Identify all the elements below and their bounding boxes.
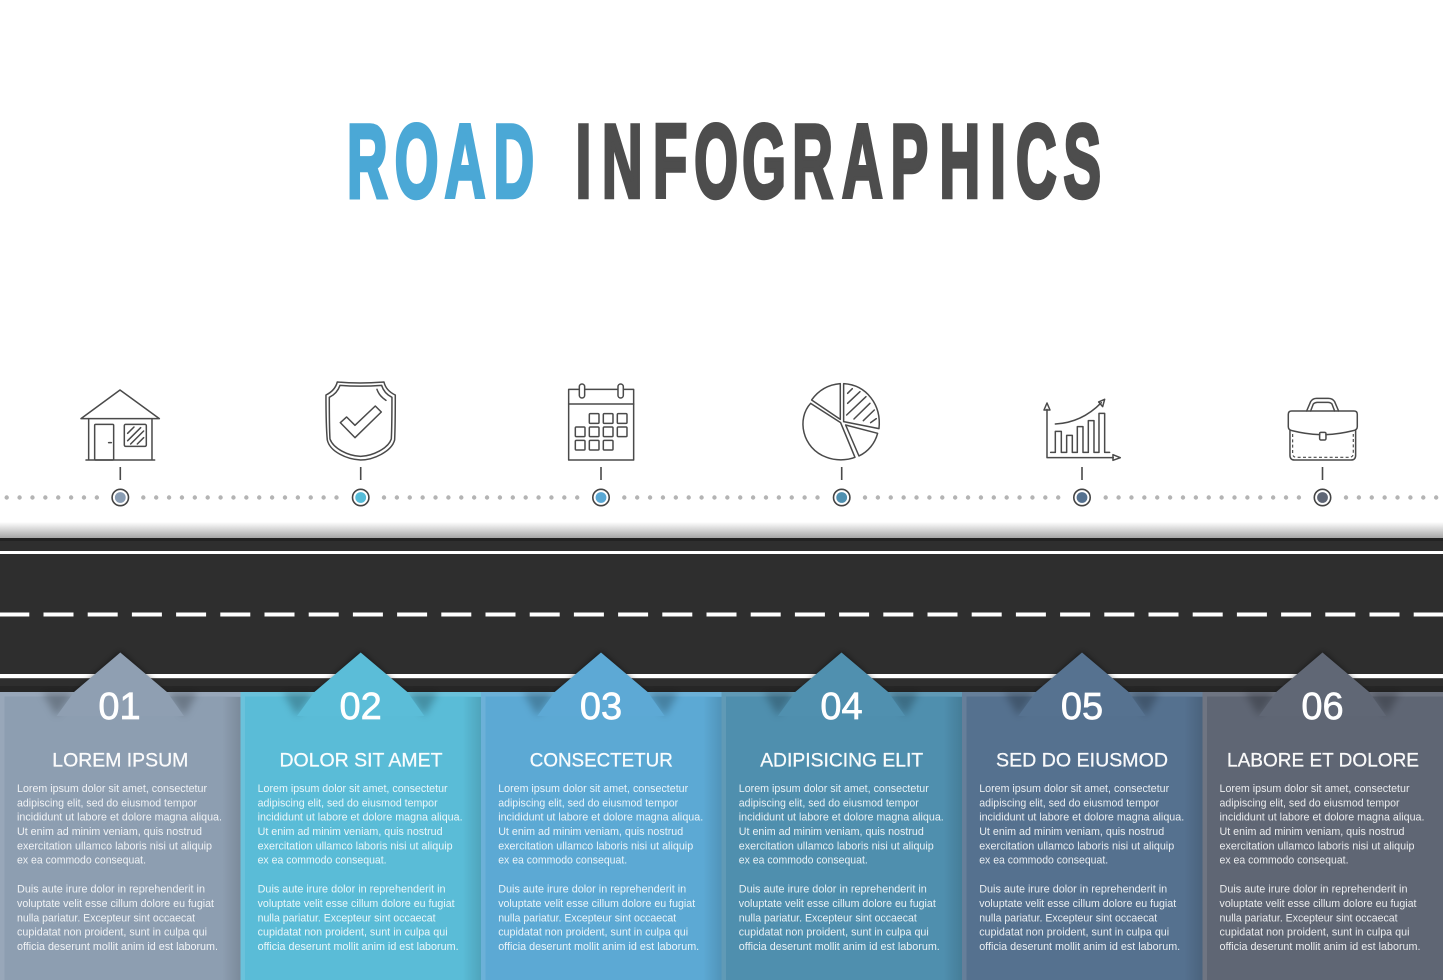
marker 4 — [834, 467, 850, 506]
panel 1 — [0, 652, 241, 980]
arrow 3 — [537, 652, 665, 716]
body text 1: Duis aute irure dolor in reprehenderit in — [17, 884, 205, 896]
icon: calendar — [569, 384, 634, 460]
arrow 4 — [778, 652, 905, 716]
panel 6 — [1202, 652, 1443, 980]
body text 1 — [17, 783, 222, 953]
marker 5 — [1074, 467, 1090, 506]
title word: INFOGRAPHICS: INFOGRAPHICS — [576, 102, 1101, 219]
body text 3: nulla pariatur. Excepteur sint occaecat — [498, 912, 676, 924]
body text 4: nulla pariatur. Excepteur sint occaecat — [739, 912, 917, 924]
number 06: 06 — [1301, 686, 1344, 728]
body text 5: officia deserunt mollit anim id est laborum. — [979, 941, 1180, 953]
body text 2 — [258, 783, 463, 953]
body text 2: incididunt ut labore et dolore magna aliqua. — [258, 812, 463, 824]
heading 4: ADIPISICING ELIT — [760, 750, 923, 772]
body text 3: Duis aute irure dolor in reprehenderit in — [498, 884, 686, 896]
body text 3: Lorem ipsum dolor sit amet, consectetur — [498, 783, 689, 795]
marker 2 — [352, 467, 369, 506]
icon: house — [81, 390, 159, 460]
number 02: 02 — [340, 686, 382, 728]
marker 1 — [112, 467, 128, 506]
heading 6: LABORE ET DOLORE — [1227, 750, 1419, 772]
heading 3: CONSECTETUR — [530, 750, 673, 772]
body text 6: voluptate velit esse cillum dolore eu fugiat — [1220, 898, 1416, 910]
body text 6: ex ea commodo consequat. — [1220, 855, 1348, 867]
arrow 2 — [297, 652, 424, 716]
panel 4 — [722, 652, 962, 980]
body text 5: exercitation ullamco laboris nisi ut aliquip — [979, 840, 1174, 852]
body text 4: Lorem ipsum dolor sit amet, consectetur — [739, 783, 929, 795]
body text 1: cupidatat non proident, sunt in culpa qui — [17, 927, 207, 939]
icon: briefcase — [1288, 398, 1357, 460]
body text 6: Ut enim ad minim veniam, quis nostrud — [1220, 826, 1404, 838]
icon: growth chart — [1044, 399, 1120, 460]
heading 5: SED DO EIUSMOD — [996, 750, 1168, 772]
body text 3 — [498, 783, 703, 953]
number 05: 05 — [1061, 686, 1103, 728]
body text 1: incididunt ut labore et dolore magna aliqua. — [17, 812, 222, 824]
panel 5 — [962, 652, 1203, 980]
body text 1: Ut enim ad minim veniam, quis nostrud — [17, 826, 202, 838]
body text 2: officia deserunt mollit anim id est laborum. — [258, 941, 459, 953]
body text 2: Duis aute irure dolor in reprehenderit in — [258, 884, 446, 896]
body text 2: adipiscing elit, sed do eiusmod tempor — [258, 797, 438, 809]
body text 3: voluptate velit esse cillum dolore eu fugiat — [498, 898, 695, 910]
body text 2: exercitation ullamco laboris nisi ut aliquip — [258, 840, 453, 852]
body text 6 — [1220, 783, 1424, 953]
body text 5: cupidatat non proident, sunt in culpa qui — [979, 927, 1169, 939]
arrow 6 — [1259, 652, 1386, 716]
body text 1: adipiscing elit, sed do eiusmod tempor — [17, 797, 197, 809]
body text 2: Ut enim ad minim veniam, quis nostrud — [258, 826, 443, 838]
body text 5: ex ea commodo consequat. — [979, 855, 1108, 867]
dotted timeline — [7, 495, 1440, 500]
body text 4: voluptate velit esse cillum dolore eu fugiat — [739, 898, 936, 910]
body text 3: incididunt ut labore et dolore magna aliqua. — [498, 812, 703, 824]
body text 6: adipiscing elit, sed do eiusmod tempor — [1220, 797, 1400, 809]
body text 1: officia deserunt mollit anim id est laborum. — [17, 941, 218, 953]
arrow 1 — [57, 652, 184, 716]
body text 4: incididunt ut labore et dolore magna aliqua. — [739, 812, 944, 824]
panel 2 — [240, 652, 482, 980]
marker 6 — [1314, 467, 1331, 506]
body text 3: Ut enim ad minim veniam, quis nostrud — [498, 826, 683, 838]
body text 4: cupidatat non proident, sunt in culpa qui — [739, 927, 929, 939]
body text 3: exercitation ullamco laboris nisi ut aliquip — [498, 840, 693, 852]
body text 6: incididunt ut labore et dolore magna aliqua. — [1220, 812, 1424, 824]
body text 4: adipiscing elit, sed do eiusmod tempor — [739, 797, 919, 809]
body text 5: voluptate velit esse cillum dolore eu fugiat — [979, 898, 1176, 910]
body text 4: Duis aute irure dolor in reprehenderit in — [739, 884, 927, 896]
body text 6: Duis aute irure dolor in reprehenderit in — [1220, 884, 1408, 896]
body text 5: Lorem ipsum dolor sit amet, consectetur — [979, 783, 1170, 795]
body text 2: Lorem ipsum dolor sit amet, consectetur — [258, 783, 448, 795]
body text 3: adipiscing elit, sed do eiusmod tempor — [498, 797, 679, 809]
body text 1: exercitation ullamco laboris nisi ut aliquip — [17, 840, 212, 852]
heading 1: LOREM IPSUM — [52, 750, 188, 772]
body text 6: officia deserunt mollit anim id est laborum. — [1220, 941, 1420, 953]
body text 4 — [739, 783, 944, 953]
marker 3 — [593, 467, 609, 506]
arrow shadows on road — [70, 652, 1372, 698]
road — [0, 538, 1443, 693]
body text 6: cupidatat non proident, sunt in culpa qui — [1220, 927, 1410, 939]
arrow 5 — [1018, 652, 1146, 716]
body text 1: Lorem ipsum dolor sit amet, consectetur — [17, 783, 207, 795]
body text 5: incididunt ut labore et dolore magna aliqua. — [979, 812, 1184, 824]
body text 1: ex ea commodo consequat. — [17, 855, 146, 867]
body text 4: ex ea commodo consequat. — [739, 855, 868, 867]
body text 4: exercitation ullamco laboris nisi ut aliquip — [739, 840, 934, 852]
body text 2: nulla pariatur. Excepteur sint occaecat — [258, 912, 436, 924]
number 03: 03 — [580, 686, 622, 728]
body text 1: nulla pariatur. Excepteur sint occaecat — [17, 912, 195, 924]
body text 5: Duis aute irure dolor in reprehenderit in — [979, 884, 1167, 896]
body text 5: Ut enim ad minim veniam, quis nostrud — [979, 826, 1164, 838]
body text 6: nulla pariatur. Excepteur sint occaecat — [1220, 912, 1398, 924]
icon: shield — [326, 382, 395, 460]
body text 1: voluptate velit esse cillum dolore eu fugiat — [17, 898, 214, 910]
body text 2: voluptate velit esse cillum dolore eu fugiat — [258, 898, 455, 910]
body text 6: Lorem ipsum dolor sit amet, consectetur — [1220, 783, 1410, 795]
body text 3: cupidatat non proident, sunt in culpa qui — [498, 927, 688, 939]
body text 2: cupidatat non proident, sunt in culpa qui — [258, 927, 448, 939]
icon: pie chart — [803, 384, 879, 460]
panel 3 — [481, 652, 722, 980]
body text 5 — [979, 783, 1184, 953]
body text 3: officia deserunt mollit anim id est laborum. — [498, 941, 699, 953]
body text 6: exercitation ullamco laboris nisi ut aliquip — [1220, 840, 1414, 852]
number 04: 04 — [820, 686, 863, 728]
body text 2: ex ea commodo consequat. — [258, 855, 387, 867]
body text 5: nulla pariatur. Excepteur sint occaecat — [979, 912, 1157, 924]
body text 5: adipiscing elit, sed do eiusmod tempor — [979, 797, 1160, 809]
number 01: 01 — [98, 686, 141, 728]
body text 3: ex ea commodo consequat. — [498, 855, 627, 867]
title word: ROAD: ROAD — [347, 102, 534, 219]
heading 2: DOLOR SIT AMET — [280, 750, 443, 772]
body text 4: officia deserunt mollit anim id est laborum. — [739, 941, 940, 953]
body text 4: Ut enim ad minim veniam, quis nostrud — [739, 826, 924, 838]
road shadow — [0, 522, 1443, 538]
title — [347, 102, 1101, 219]
